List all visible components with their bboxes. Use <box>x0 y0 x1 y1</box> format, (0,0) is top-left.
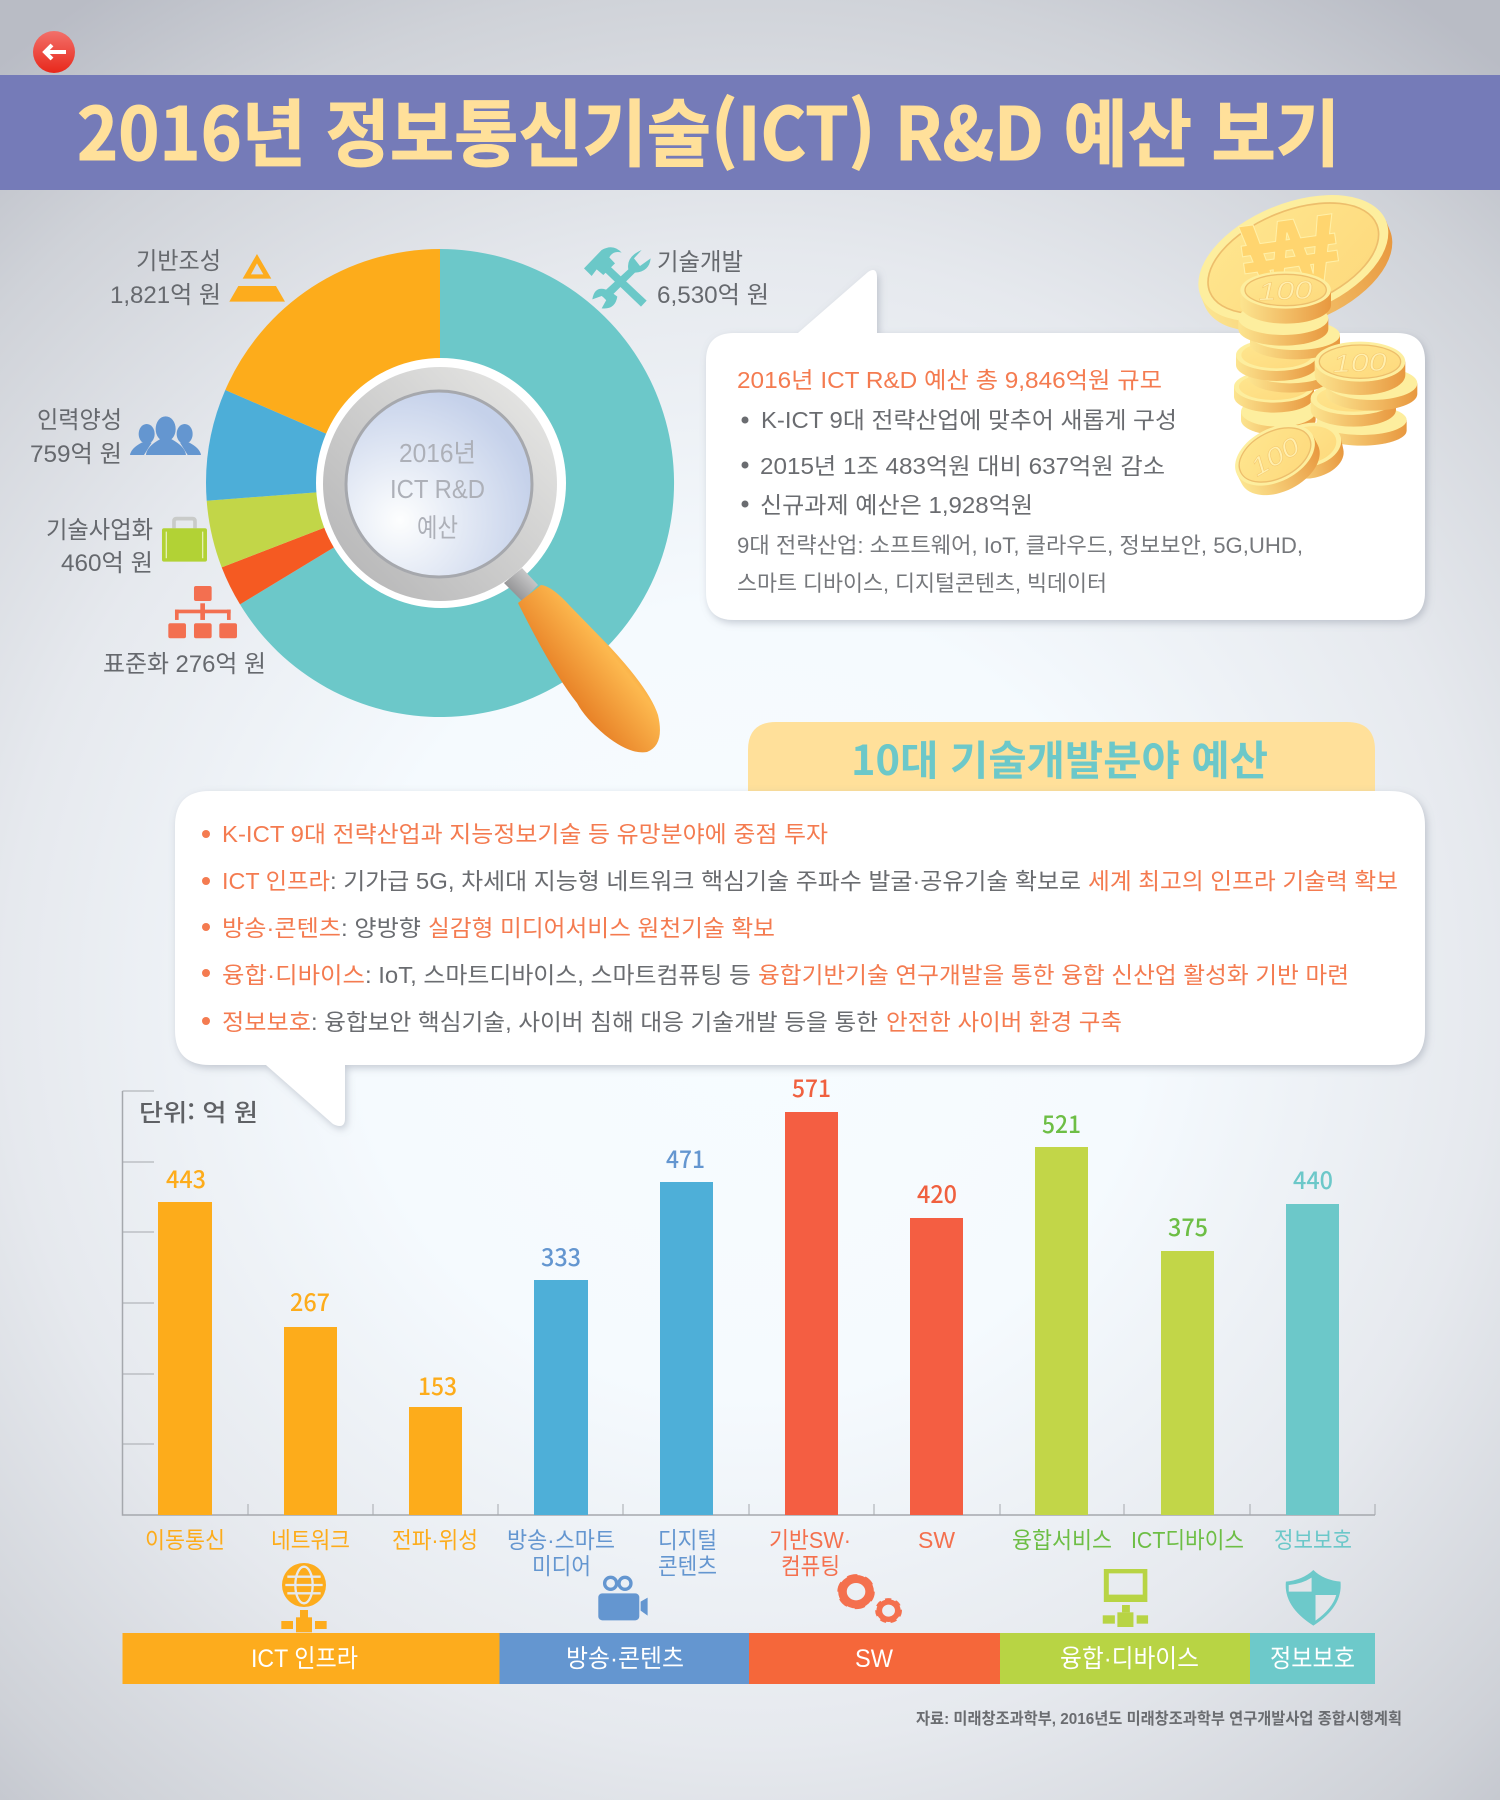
band labels: 방송·콘텐츠 <box>566 1645 684 1673</box>
category labels: 네트워크 <box>271 1527 350 1553</box>
strategic industries note <box>737 533 1303 596</box>
category labels: 기반SW· <box>769 1527 851 1553</box>
point 2: ICT 인프라 <box>222 868 330 894</box>
bullets <box>202 830 210 1025</box>
value labels: 420 <box>917 1175 957 1210</box>
point 3 <box>222 915 775 941</box>
speech bubble: key points <box>175 791 1425 1126</box>
value labels: 440 <box>1293 1161 1333 1196</box>
value labels: 267 <box>290 1283 330 1318</box>
magnifying glass <box>316 358 660 752</box>
donut chart: budget share <box>206 249 674 717</box>
band labels <box>251 1645 1355 1673</box>
strategic industries note: 9대 전략산업: 소프트웨어, IoT, 클라우드, 정보보안, 5G,UHD, <box>737 533 1303 558</box>
icon: shield <box>1286 1570 1341 1626</box>
magnifier text <box>390 438 485 543</box>
label: 기반조성 <box>110 248 221 309</box>
value labels <box>166 1069 1333 1402</box>
point 1: K-ICT 9대 전략산업과 지능정보기술 등 유망분야에 중점 투자 <box>222 821 828 847</box>
icon: gold coins <box>1180 170 1417 508</box>
point 3: 방송·콘텐츠 <box>222 915 341 941</box>
label: 기술개발: 6,530억 원 <box>657 282 769 309</box>
category labels: 컴퓨팅 <box>781 1553 840 1579</box>
label: 기술개발: 기술개발 <box>657 249 743 276</box>
bars <box>158 1112 1339 1515</box>
magnifier text: 2016년 <box>399 438 476 468</box>
point 2: 세계 최고의 인프라 기술력 확보 <box>1088 868 1398 894</box>
section tab: heading: 10대 기술개발분야 예산 <box>851 727 1268 787</box>
strategic industries note: 스마트 디바이스, 디지털콘텐츠, 빅데이터 <box>737 571 1107 596</box>
point 4: 융합·디바이스 <box>222 962 365 988</box>
value labels: 153 <box>418 1367 457 1402</box>
right stack <box>1317 405 1407 446</box>
point 4: : IoT, 스마트디바이스, 스마트컴퓨팅 등 <box>365 962 751 988</box>
point 2 <box>222 868 1398 894</box>
band labels: 융합·디바이스 <box>1060 1645 1199 1673</box>
summary bullets: K-ICT 9대 전략산업에 맞추어 새롭게 구성 <box>761 407 1177 433</box>
category labels: 디지털 <box>658 1527 717 1553</box>
back button icon <box>33 31 75 73</box>
summary bullets <box>742 407 1177 518</box>
category labels: 전파·위성 <box>392 1527 478 1553</box>
section tab: heading <box>748 722 1375 795</box>
category band <box>122 1633 1375 1684</box>
point 2: : 기가급 5G, 차세대 지능형 네트워크 핵심기술 주파수 발굴·공유기술 확보로 <box>330 868 1081 894</box>
summary heading: 2016년 ICT R&D 예산 총 9,846억원 규모 <box>737 367 1162 393</box>
speech bubble: budget summary <box>706 270 1425 620</box>
point 4 <box>222 962 1349 988</box>
summary bullets: 2015년 1조 483억원 대비 637억원 감소 <box>760 453 1165 479</box>
big won coin <box>1180 170 1411 357</box>
category labels: 융합서비스 <box>1012 1527 1112 1553</box>
icon: people <box>130 416 201 455</box>
point 5: : 융합보안 핵심기술, 사이버 침해 대응 기술개발 등을 통한 <box>311 1009 878 1035</box>
category labels <box>145 1527 1352 1579</box>
label: 기술사업화 <box>46 517 153 577</box>
category labels: 방송·스마트 <box>507 1527 615 1553</box>
value labels: 333 <box>541 1238 581 1273</box>
axes <box>122 1091 1375 1515</box>
category labels: 이동통신 <box>145 1527 225 1553</box>
band labels: SW <box>855 1645 893 1673</box>
source note: 자료: 미래창조과학부, 2016년도 미래창조과학부 연구개발사업 종합시행계획 <box>916 1709 1402 1728</box>
label: 인력양성: 759억 원 <box>30 441 122 468</box>
front coins <box>1271 417 1348 485</box>
icon: gold coins: ₩ <box>1235 193 1345 317</box>
icon: briefcase <box>162 519 207 562</box>
icon: globe network <box>281 1563 327 1632</box>
summary bullets: 신규과제 예산은 1,928억원 <box>760 492 1033 518</box>
title: 2016년 정보통신기술(ICT) R&D 예산 보기 <box>77 76 1340 182</box>
label: 기술사업화: 460억 원 <box>61 550 153 577</box>
label: 인력양성: 인력양성 <box>37 407 122 434</box>
point 3: 실감형 미디어서비스 원천기술 확보 <box>428 915 775 941</box>
value labels: 375 <box>1168 1208 1208 1243</box>
magnifier text: 예산 <box>417 513 458 543</box>
category labels: 미디어 <box>532 1553 591 1579</box>
category labels: SW <box>918 1527 955 1553</box>
value labels: 521 <box>1042 1105 1081 1140</box>
point 5: 안전한 사이버 환경 구축 <box>886 1009 1122 1035</box>
unit label: 단위: 억 원 <box>139 1093 258 1128</box>
label: 기술개발 <box>657 249 769 309</box>
icon: video camera <box>598 1577 648 1620</box>
icon: tools <box>584 247 651 309</box>
value labels: 443 <box>166 1160 206 1195</box>
icon: org chart <box>168 586 237 638</box>
category labels: 콘텐츠 <box>658 1553 717 1579</box>
point 3: : 양방향 <box>341 915 421 941</box>
band labels: 정보보호 <box>1270 1645 1355 1673</box>
icon: pyramid <box>229 254 285 302</box>
category labels: 정보보호 <box>1274 1527 1352 1553</box>
point 5: 정보보호 <box>222 1009 311 1035</box>
coin values: 100 <box>1246 432 1305 482</box>
label: 표준화: 표준화 276억 원 <box>103 651 266 678</box>
point 5 <box>222 1009 1122 1035</box>
stacked coins <box>1241 397 1316 435</box>
value labels: 571 <box>792 1069 831 1104</box>
label: 기반조성: 1,821억 원 <box>110 282 221 309</box>
label: 인력양성 <box>30 407 122 468</box>
band labels: ICT 인프라 <box>251 1645 358 1673</box>
category labels: ICT디바이스 <box>1131 1527 1244 1553</box>
label: 기반조성: 기반조성 <box>136 248 221 275</box>
value labels: 471 <box>666 1140 705 1175</box>
coin values: 100 <box>1332 348 1387 378</box>
label: 기술사업화: 기술사업화 <box>46 517 153 544</box>
bar chart <box>122 1069 1375 1579</box>
icon: gears <box>839 1576 900 1622</box>
coin values: 100 <box>1258 276 1313 306</box>
magnifier text: ICT R&D <box>390 474 485 504</box>
title band <box>0 75 1500 190</box>
coin values <box>1246 276 1387 482</box>
icon: monitor network <box>1103 1569 1148 1627</box>
point 4: 융합기반기술 연구개발을 통한 융합 신산업 활성화 기반 마련 <box>758 962 1349 988</box>
